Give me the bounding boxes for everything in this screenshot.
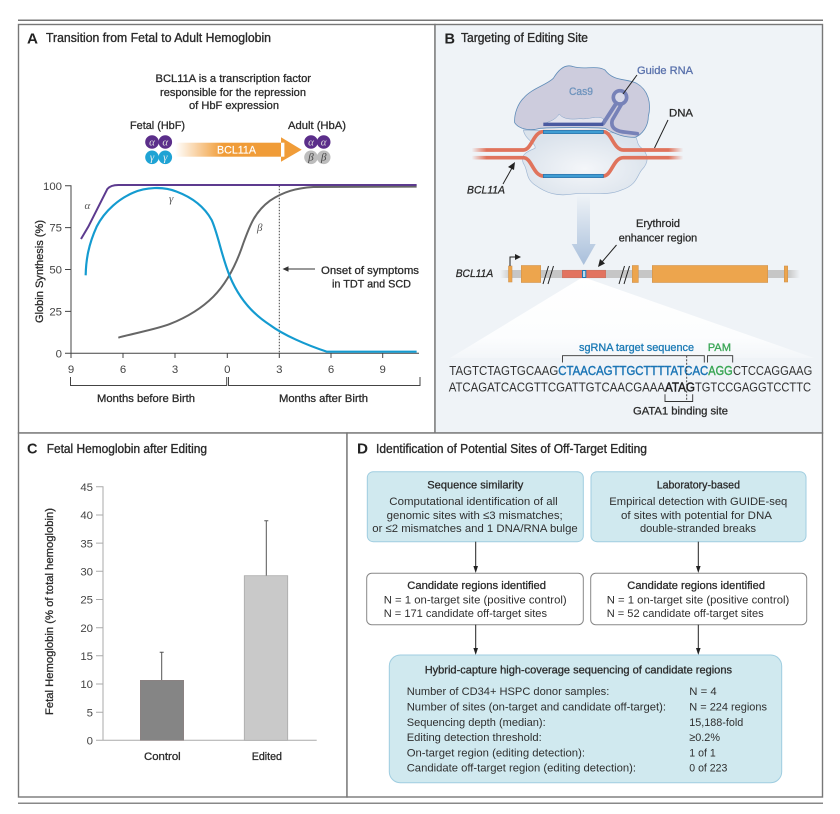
x tick labels: 3 [276,364,282,376]
text: BCL11A explanation: BCL11A is a transcription factor [156,73,311,85]
box: hybrid-capture sequencing: Editing detection threshold: [407,732,542,744]
icon: adult hemoglobin subunits: α [321,136,327,148]
illustration: Cas9 on DNA [472,66,683,195]
heading B: Targeting of Editing Site [461,30,588,45]
break marks [543,266,630,284]
text: BCL11A explanation: responsible for the repression [160,87,306,99]
icon: adult hemoglobin subunits: β [320,152,327,164]
icon: fetal hemoglobin subunits: α [149,136,155,148]
box: sequence similarity: genomic sites with ≤3 mismatches; [387,510,563,522]
icon: adult hemoglobin subunits [304,135,331,164]
panel letter D: D [357,440,368,458]
icon: adult hemoglobin subunits: α [308,136,314,148]
sequence line 2: ATCAGATCACGTTCGATTGTCAACGAAA [449,380,666,394]
label: GATA1 binding site: GATA1 binding site [633,406,728,418]
sequence line 1 [449,364,812,378]
box: candidate regions left [367,573,583,625]
curve labels: α [84,200,90,212]
panel letter A: A [27,30,38,48]
box: candidate regions left: Candidate regions identified [407,580,546,592]
box: hybrid-capture sequencing: 0 of 223 [689,763,727,775]
y tick labels: 25 [80,594,93,606]
icon: fetal hemoglobin subunits: γ [150,152,155,164]
box: laboratory-based [591,472,806,542]
y tick labels [80,482,93,748]
y tick labels: 0 [56,348,62,360]
panel: A transition from fetal to adult hemoglobin [18,24,435,433]
heading A: Transition from Fetal to Adult Hemoglobin [46,30,271,45]
label: Control: Control [144,751,181,763]
x tick labels: 0 [224,364,230,376]
box: hybrid-capture sequencing [389,655,782,783]
y tick labels: 10 [80,679,93,691]
icon: fetal hemoglobin subunits [145,135,172,164]
box: candidate regions left: N = 1 on-target site (positive control) [384,594,567,606]
box: sequence similarity: or ≤2 mismatches and 1 DNA/RNA bulge [372,523,578,535]
y tick labels: 30 [80,566,93,578]
axes [96,487,317,740]
arrow: laboratory to candidates [696,542,701,573]
sequence line 2: TGTCCGAGGTCCTTC [695,380,811,394]
box: laboratory-based: Empirical detection with GUIDE-seq [609,496,787,508]
box: candidate regions right: N = 52 candidate off-target sites [607,608,764,620]
label: BCL11A gene: BCL11A [456,268,493,280]
enhancer [562,270,606,278]
x tick labels: 6 [120,364,126,376]
guide RNA [543,91,637,134]
arrow: to DNA strand [503,162,515,184]
box: candidate regions right: Candidate regions identified [627,580,765,592]
bar: control [140,680,184,740]
label: erythroid enhancer region: Erythroid [636,218,680,230]
bar: edited [244,576,288,740]
icon: fetal hemoglobin subunits: α [162,136,168,148]
frame bottom rule [18,802,823,804]
label: months before birth: Months before Birth [97,393,195,405]
panel: D identification of off-target sites [347,433,822,797]
heading C: Fetal Hemoglobin after Editing [47,441,207,456]
arrow: similarity to candidates [473,542,478,573]
label: DNA: DNA [669,108,693,120]
y axis title: Fetal Hemoglobin (% of total hemoglobin) [44,508,56,715]
panel letter B: B [444,30,455,48]
box: sequence similarity: Computational identification of all [389,496,558,508]
y tick labels: 20 [80,623,93,635]
icon: adult hemoglobin subunits: β [307,152,314,164]
sequence line 1: AGG [708,364,733,378]
bar chart [44,482,317,763]
box: hybrid-capture sequencing: Sequencing depth (median): [407,717,546,729]
label: erythroid enhancer region [619,218,697,245]
callout arrow: onset [282,266,315,272]
sequence line 1: CTCCAGGAAG [733,364,812,378]
label: Guide RNA: Guide RNA [637,65,693,77]
line chart: globin synthesis [34,181,420,405]
sequence line 2: ATAG [665,380,695,394]
box: hybrid-capture sequencing: 15,188-fold [689,717,743,729]
label: PAM: PAM [708,342,731,354]
arrow: right candidates to sequencing [696,625,701,655]
box: sequence similarity [367,472,583,542]
box: hybrid-capture sequencing: On-target region (editing detection): [407,747,585,759]
box: hybrid-capture sequencing: Candidate off-target region (editing detection): [407,763,636,775]
zoom wedge [450,277,814,358]
y tick labels: 75 [49,223,62,235]
gene diagram [500,254,800,284]
curve labels [84,193,263,234]
box: candidate regions right [591,573,807,625]
box: laboratory-based: double-stranded breaks [640,523,756,535]
y tick labels [43,181,62,360]
box: hybrid-capture sequencing: Hybrid-capture high-coverage sequencing of candidate regions [425,665,732,677]
frame top rule [18,20,823,21]
callout: onset of symptoms: Onset of symptoms [321,265,419,277]
box: hybrid-capture sequencing: Number of CD34+ HSPC donor samples: [407,686,609,698]
arrow: BCL11A: BCL11A [217,145,256,157]
x tick labels: 3 [172,364,178,376]
y tick labels: 25 [49,306,62,318]
label: erythroid enhancer region: enhancer region [619,233,697,245]
curve: gamma [86,188,417,352]
leader line: DNA [654,120,668,148]
panel letter C: C [27,440,38,458]
arrow: BCL11A [175,137,302,162]
x tick labels: 6 [328,364,334,376]
error bar: control [160,652,164,680]
sequence line 2 [449,380,811,394]
box: candidate regions left: N = 171 candidate off-target sites [384,608,547,620]
box: hybrid-capture sequencing: 1 of 1 [689,747,716,759]
curve labels: γ [169,193,174,205]
y tick labels: 35 [80,538,93,550]
box: hybrid-capture sequencing: ≥0.2% [689,732,720,744]
promoter arrow [510,254,521,266]
panel: C fetal hemoglobin after editing [18,433,347,797]
upper lobe notch [544,114,603,124]
text: BCL11A explanation [156,73,311,112]
box: hybrid-capture sequencing: N = 4 [689,686,717,698]
curve: alpha [81,185,417,239]
lower lobe of Cas9 [522,130,647,195]
axes and ticks [65,186,419,358]
y tick labels: 45 [80,482,93,494]
DNA strands [472,132,683,176]
arrow: large blue down [572,195,596,265]
dashed cut line [686,356,688,402]
y tick labels: 5 [87,708,93,720]
box: laboratory-based: of sites with potential for DNA [621,510,772,522]
box: laboratory-based: Laboratory-based [657,479,740,491]
target strand highlights [543,130,603,178]
label: months after birth: Months after Birth [279,393,368,405]
x tick labels [68,364,386,376]
arrow: left candidates to sequencing [473,625,478,655]
x tick labels: 9 [380,364,386,376]
x tick labels: 9 [68,364,74,376]
curve labels: β [256,222,263,234]
y tick labels: 100 [43,181,62,193]
heading D: Identification of Potential Sites of Off-Target Editing [376,441,647,456]
y tick labels: 0 [87,736,93,748]
icon: fetal hemoglobin subunits: γ [163,152,168,164]
label: sgRNA target sequence: sgRNA target sequence [579,342,694,354]
y tick labels: 40 [80,510,93,522]
sequence line 1: CTAACAGTTGCTTTTATCAC [558,364,708,378]
callout: onset of symptoms: in TDT and SCD [332,279,411,291]
sequence line 1: TAGTCTAGTGCAAG [449,364,558,378]
y axis label: Globin Synthesis (%) [34,220,46,323]
callout: onset of symptoms [321,265,419,291]
dotted line: 3 months [278,186,280,353]
upper lobe of Cas9 [515,66,650,137]
label: Cas9: Cas9 [569,86,593,98]
label: Fetal HbF: Fetal (HbF) [130,120,185,132]
y tick labels: 15 [80,651,93,663]
axis brackets [70,377,420,386]
box: candidate regions right: N = 1 on-target site (positive control) [607,594,789,606]
label: Adult HbA: Adult (HbA) [288,120,346,132]
box: hybrid-capture sequencing: N = 224 regions [689,701,767,713]
box: sequence similarity: Sequence similarity [427,479,524,491]
box: hybrid-capture sequencing: Number of sites (on-target and candidate off-target): [407,701,666,713]
editing site [582,270,586,278]
y tick labels: 50 [49,264,62,276]
label: Edited: Edited [252,751,282,763]
arrow: enhancer [598,245,616,267]
text: BCL11A explanation: of HbF expression [189,100,279,112]
label: BCL11A on DNA: BCL11A [467,185,505,197]
error bar: edited [264,521,268,576]
curve: beta [118,187,417,338]
brackets [562,356,733,402]
panel: B targeting of editing site [435,24,822,433]
leader line: Guide RNA [623,75,637,94]
